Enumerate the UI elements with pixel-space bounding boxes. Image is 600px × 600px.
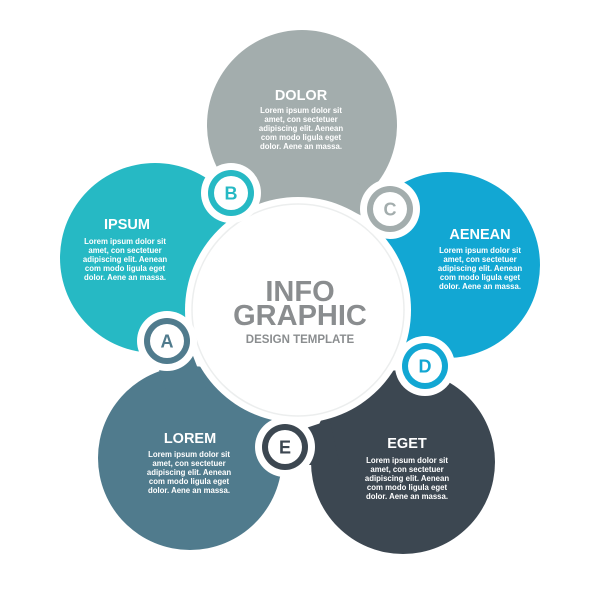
text: dolor: dolor. Aene an massa. <box>260 142 342 151</box>
text: eget: Lorem ipsum dolor sit <box>366 456 448 465</box>
text: ipsum: adipiscing elit. Aenean <box>83 255 167 264</box>
badge C <box>360 179 420 239</box>
text: ipsum: Lorem ipsum dolor sit <box>84 237 166 246</box>
text: eget: amet, con sectetuer <box>370 465 444 474</box>
center title: INFO <box>265 276 335 308</box>
text: lorem: adipiscing elit. Aenean <box>147 468 231 477</box>
text: aenean: amet, con sectetuer <box>443 255 517 264</box>
text: aenean: com modo ligula eget <box>440 273 520 282</box>
text: ipsum <box>83 217 167 282</box>
text: dolor: amet, con sectetuer <box>264 115 338 124</box>
center circle <box>185 197 411 423</box>
text: ipsum: amet, con sectetuer <box>88 246 162 255</box>
badge E <box>255 417 315 477</box>
text: aenean: adipiscing elit. Aenean <box>438 264 522 273</box>
petal: dolor <box>207 30 397 225</box>
center title: GRAPHIC <box>233 300 367 332</box>
text: lorem <box>147 431 231 495</box>
text: aenean: Lorem ipsum dolor sit <box>439 246 521 255</box>
text: dolor <box>259 88 343 151</box>
text: ipsum: dolor. Aene an massa. <box>84 273 166 282</box>
center title <box>233 276 367 346</box>
petal: ipsum <box>60 163 250 353</box>
center title: DESIGN TEMPLATE <box>246 334 355 346</box>
badge E: E <box>279 438 291 458</box>
badge D: D <box>418 356 432 376</box>
text: eget: dolor. Aene an massa. <box>366 492 448 501</box>
text: aenean: AENEAN <box>449 227 511 243</box>
text: lorem: amet, con sectetuer <box>152 459 226 468</box>
text: eget: EGET <box>387 436 427 452</box>
text: dolor: Lorem ipsum dolor sit <box>260 106 342 115</box>
text: lorem: dolor. Aene an massa. <box>148 486 230 495</box>
badge A: A <box>160 332 174 352</box>
text: lorem: Lorem ipsum dolor sit <box>148 450 230 459</box>
badge D <box>395 336 455 396</box>
text: dolor: com modo ligula eget <box>261 133 341 142</box>
petal: eget <box>270 370 495 554</box>
petal: lorem <box>98 335 282 550</box>
badge A <box>137 311 197 371</box>
text: dolor: adipiscing elit. Aenean <box>259 124 343 133</box>
text: dolor: DOLOR <box>275 88 328 104</box>
text: ipsum: com modo ligula eget <box>85 264 165 273</box>
text: aenean: dolor. Aene an massa. <box>439 282 521 291</box>
badge B <box>201 163 261 223</box>
text: eget: com modo ligula eget <box>367 483 447 492</box>
badge C: C <box>384 200 396 220</box>
text: lorem: LOREM <box>164 431 216 447</box>
petal: aenean <box>354 172 540 370</box>
text: ipsum: IPSUM <box>104 217 150 233</box>
text: eget: adipiscing elit. Aenean <box>365 474 449 483</box>
text: aenean <box>438 227 522 291</box>
text: lorem: com modo ligula eget <box>149 477 229 486</box>
badge B: B <box>224 184 238 204</box>
text: eget <box>365 436 449 501</box>
